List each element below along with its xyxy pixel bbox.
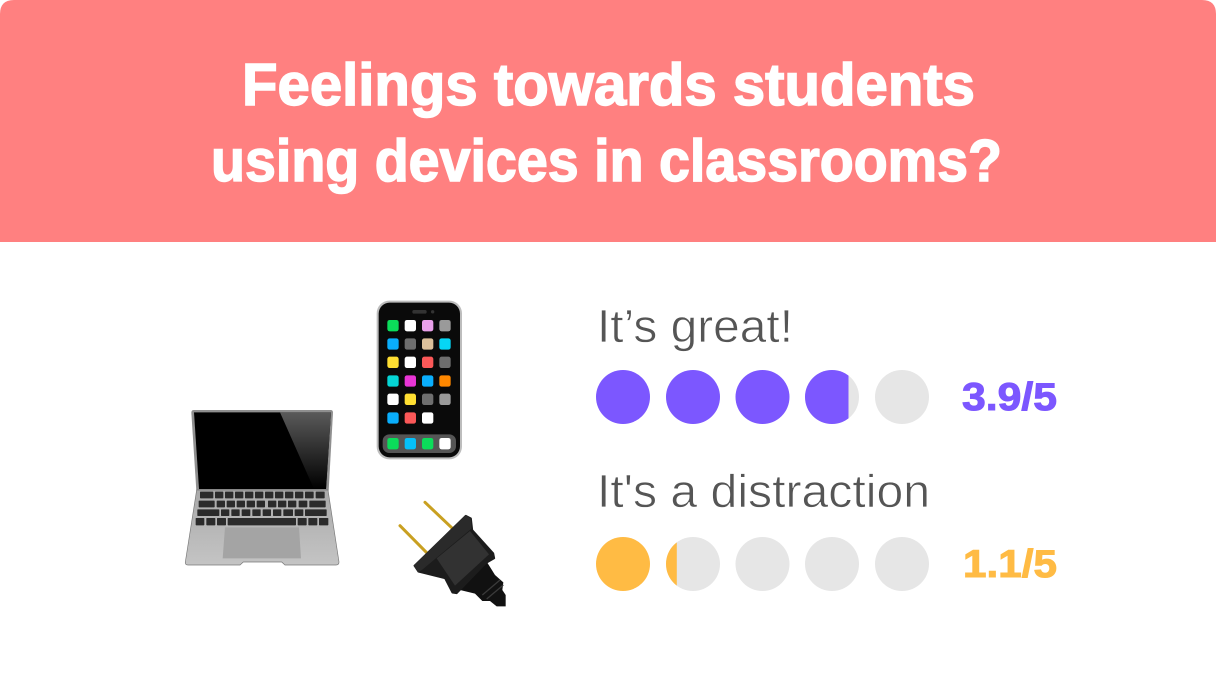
icon: laptop <box>185 410 339 565</box>
header banner <box>0 0 1216 242</box>
label: It's great: It’s great! <box>597 300 793 352</box>
icon: smartphone <box>377 301 462 459</box>
label: It's a distraction: It's a distraction <box>597 465 930 517</box>
rating dots: It's a distraction <box>596 537 929 591</box>
score: 3.9/5: 3.9/5 <box>962 376 1057 419</box>
score: 1.1/5: 1.1/5 <box>963 543 1057 586</box>
title: Feelings towards students <box>242 52 975 118</box>
icon: power plug <box>400 502 506 606</box>
title <box>211 52 1002 194</box>
title: using devices in classrooms? <box>211 128 1002 194</box>
rating dots: It's great <box>596 370 929 424</box>
